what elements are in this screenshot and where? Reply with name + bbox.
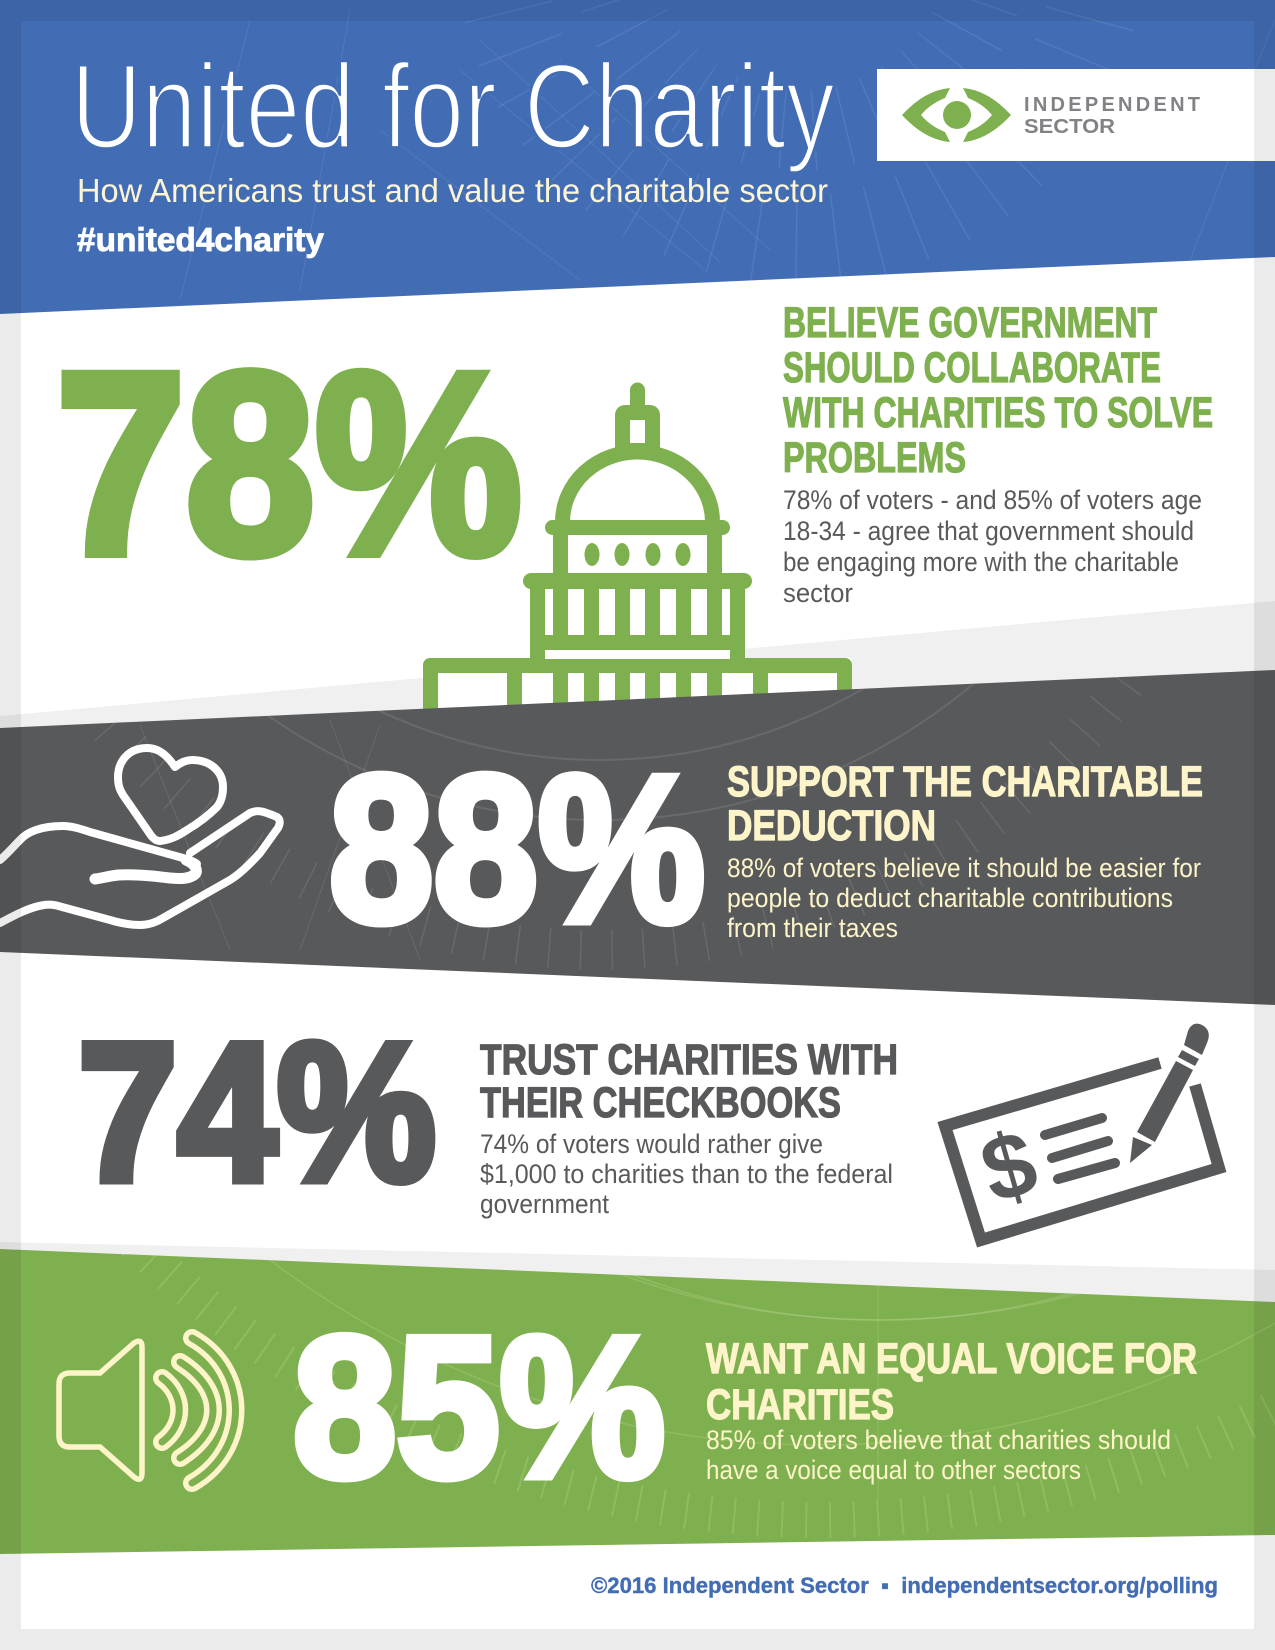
heading: government: [783, 299, 1213, 482]
logo: Independent Sector: INDEPENDENT: [1024, 94, 1200, 116]
stat: 88%: 88%: [329, 733, 705, 966]
icon: check and pencil: $: [970, 1111, 1048, 1223]
body: deduction: from their taxes: [727, 913, 898, 943]
body: checkbooks: [480, 1129, 893, 1219]
body: equal voice: 85% of voters believe that charities should: [706, 1425, 1171, 1455]
body: deduction: 88% of voters believe it should be easier for: [727, 853, 1201, 883]
body: government: 18-34 - agree that government should: [783, 516, 1194, 546]
stat: 74%: 74%: [78, 1002, 436, 1222]
body: government: [783, 485, 1202, 608]
icon: speaker: [59, 1338, 236, 1483]
icon: hand holding heart: [0, 748, 280, 925]
icon: check and pencil: [945, 1024, 1219, 1240]
body: checkbooks: $1,000 to charities than to the federal: [480, 1159, 893, 1189]
icon: capitol building: [423, 383, 852, 720]
body: checkbooks: 74% of voters would rather give: [480, 1129, 823, 1159]
heading: equal voice: CHARITIES: [706, 1381, 894, 1429]
panel: green band: [0, 1249, 1275, 1554]
heading: government: BELIEVE GOVERNMENT: [783, 299, 1157, 347]
heading: checkbooks: TRUST CHARITIES WITH: [480, 1036, 898, 1084]
panel: dark band: [0, 670, 1275, 1005]
heading: government: PROBLEMS: [783, 434, 966, 482]
body: equal voice: have a voice equal to other sectors: [706, 1455, 1081, 1485]
body: government: be engaging more with the charitable: [783, 547, 1179, 577]
body: deduction: people to deduct charitable contributions: [727, 883, 1173, 913]
footer credit: ©2016 Independent Sector ▪ independentsector.org/polling: [591, 1573, 1218, 1598]
logo: Independent Sector: [877, 69, 1275, 161]
heading: checkbooks: THEIR CHECKBOOKS: [480, 1079, 841, 1127]
subtitle: How Americans trust and value the charitable sector: [77, 172, 828, 209]
title: United for Charity: [71, 38, 835, 174]
light strip above green band: [0, 1242, 1275, 1320]
logo: Independent Sector: SECTOR: [1024, 116, 1116, 138]
body: deduction: [727, 853, 1201, 943]
heading: equal voice: [706, 1335, 1197, 1429]
stat: 85%: 85%: [293, 1296, 665, 1519]
light strip above dark band: [0, 601, 1275, 760]
hashtag: #united4charity: [77, 221, 325, 258]
body: government: sector: [783, 578, 853, 608]
heading: deduction: [727, 758, 1203, 850]
heading: checkbooks: [480, 1036, 898, 1127]
panel: header band: [0, 0, 1275, 314]
body: government: 78% of voters - and 85% of voters age: [783, 485, 1202, 515]
body: checkbooks: government: [480, 1189, 609, 1219]
body: equal voice: [706, 1425, 1171, 1485]
stat: 78%: 78%: [56, 319, 522, 608]
heading: deduction: DEDUCTION: [727, 802, 936, 850]
